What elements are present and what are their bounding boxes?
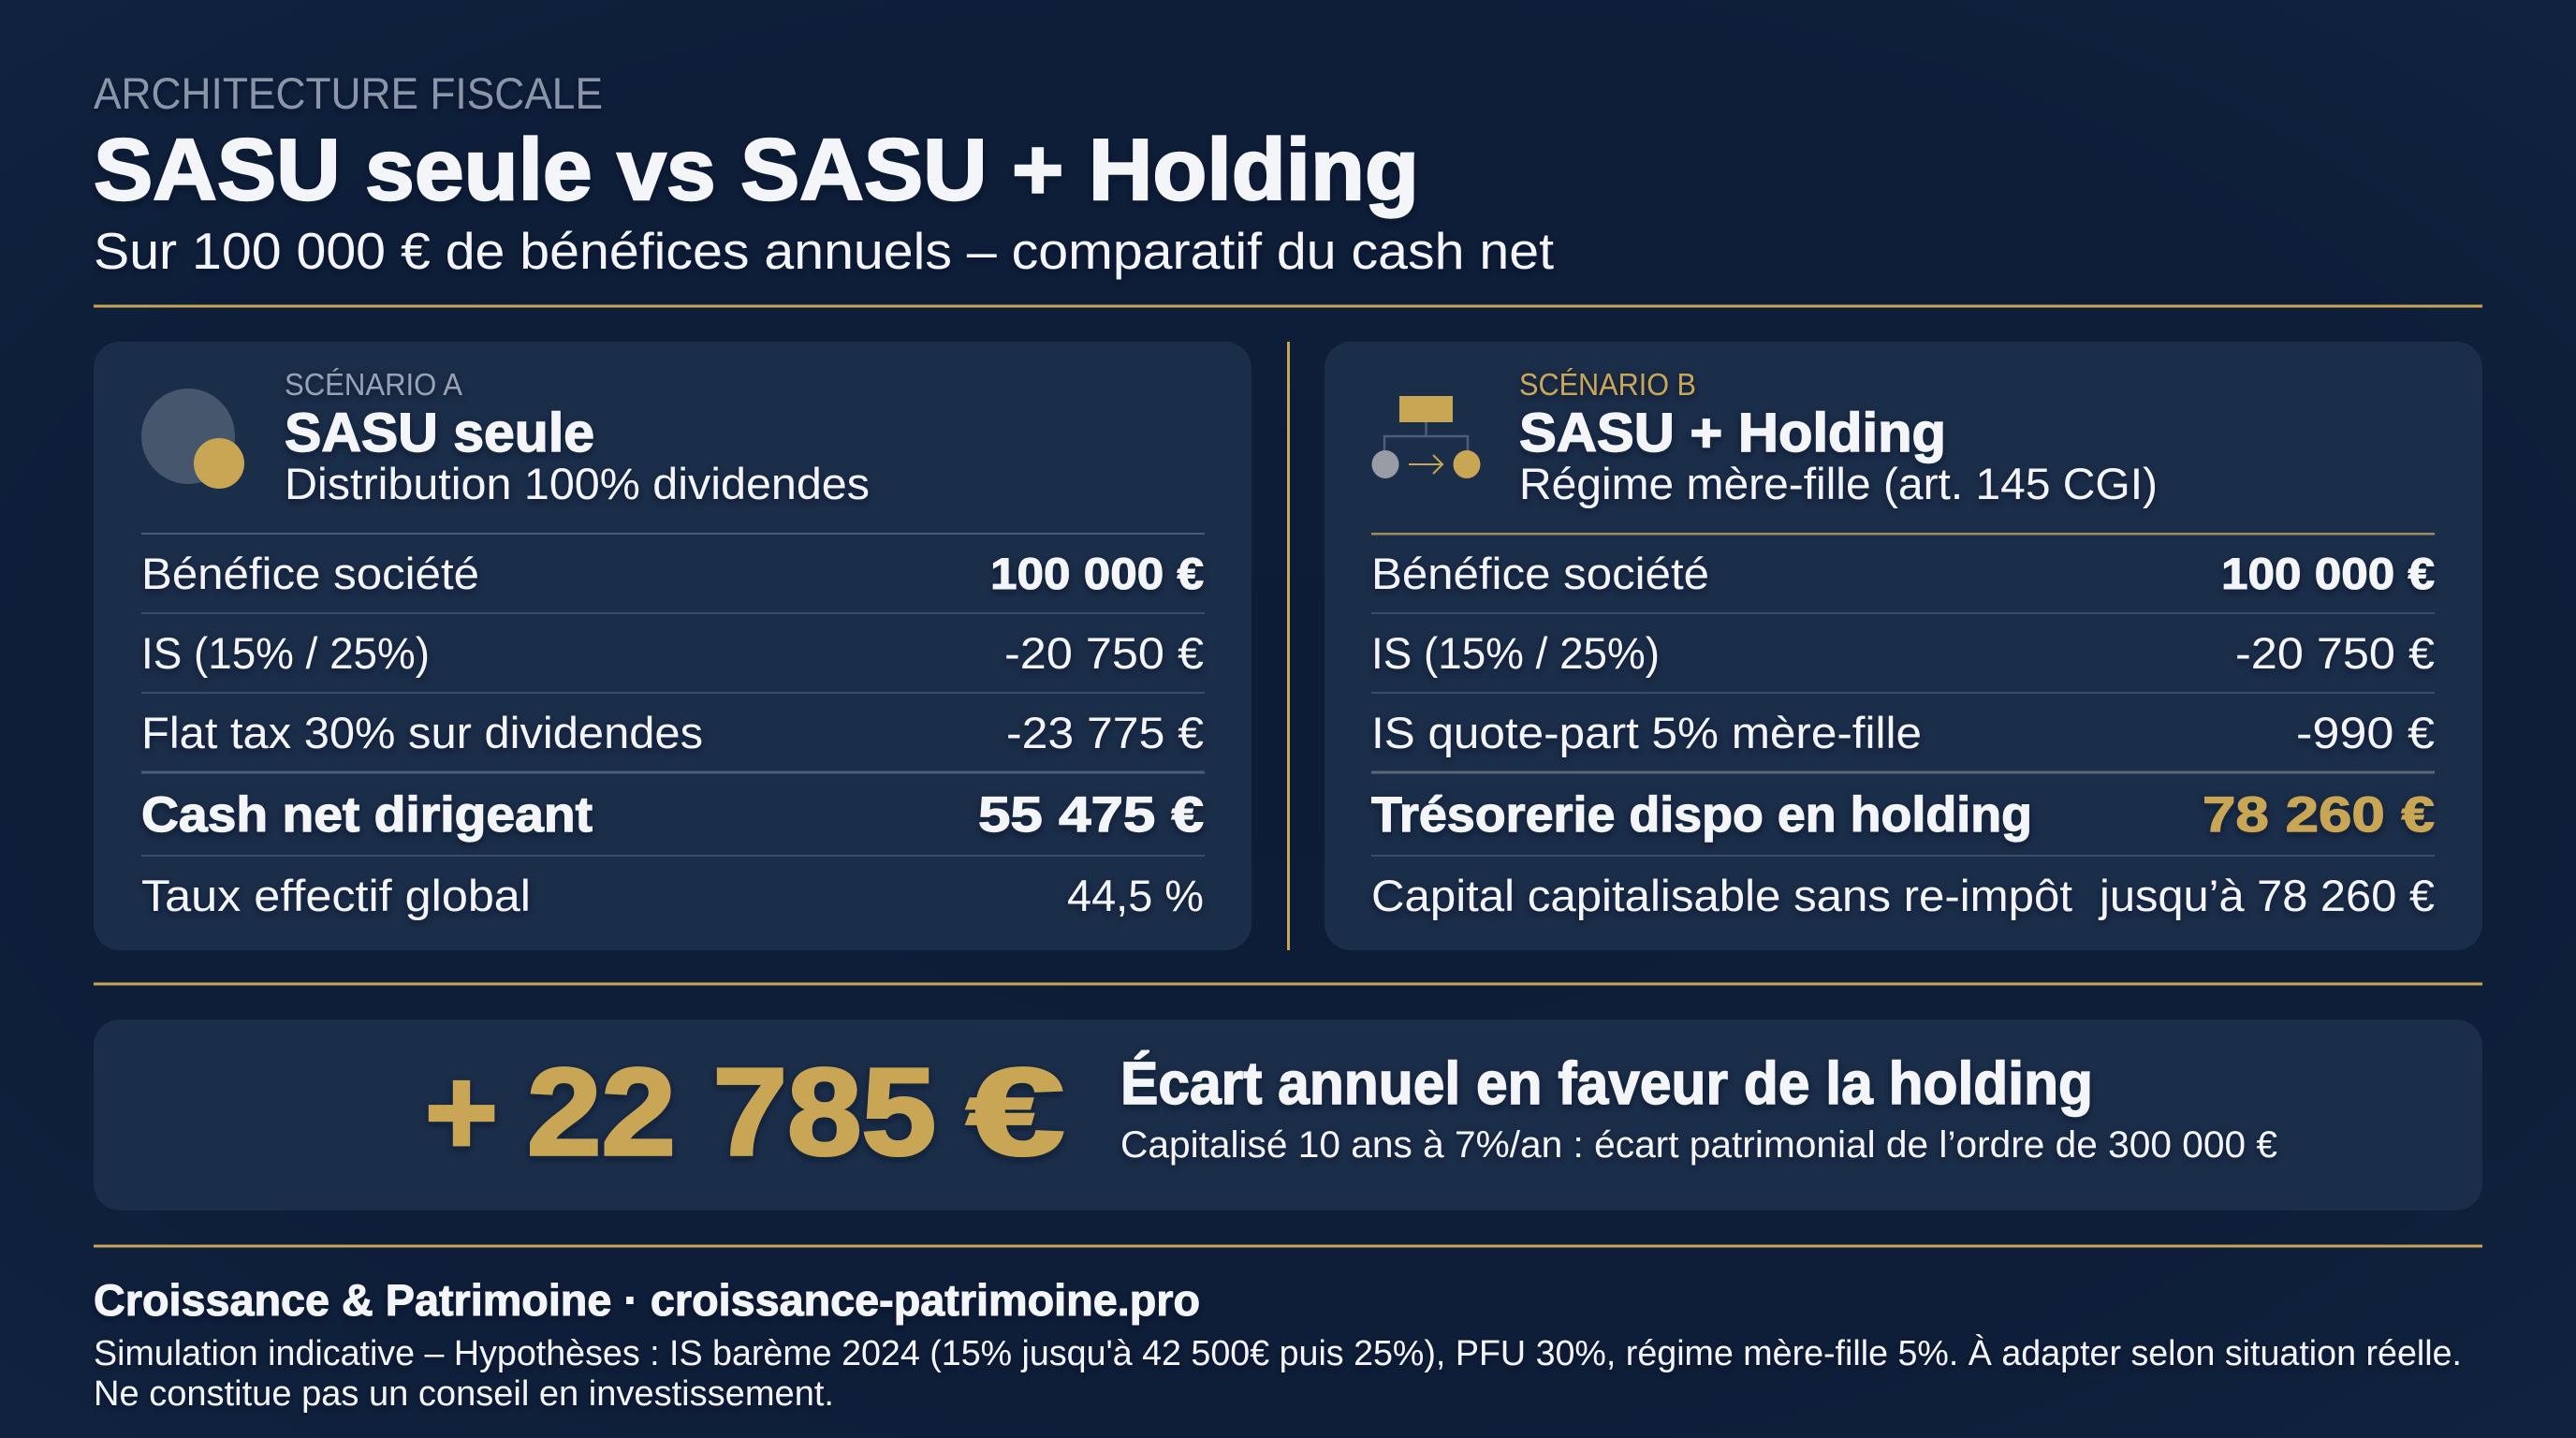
rows table B: jusqu’à 78 260 € <box>2098 871 2435 920</box>
disclaimer <box>94 1333 2462 1414</box>
eyebrow: ARCHITECTURE FISCALE <box>94 68 603 118</box>
scenario A heading: SCÉNARIO A <box>285 367 462 402</box>
rows table B: -990 € <box>2296 708 2435 757</box>
rows table B: IS quote-part 5% mère-fille <box>1371 708 1922 757</box>
rows table A: IS (15% / 25%) <box>141 628 430 678</box>
scenario A heading <box>285 367 870 508</box>
footer <box>94 1275 2462 1414</box>
rows table A: Bénéfice société <box>141 549 479 598</box>
panel: annual gap band <box>94 1020 2482 1211</box>
rows table B: Trésorerie dispo en holding <box>1371 787 2032 843</box>
brand line: Croissance & Patrimoine · croissance-patrimoine.pro <box>94 1275 1200 1325</box>
rows table B: Capital capitalisable sans re-impôt <box>1371 871 2072 920</box>
disclaimer: Simulation indicative – Hypothèses : IS barème 2024 (15% jusqu'à 42 500€ puis 25%), PFU 30%, régime mère-fille 5%. À adapter selon situation réelle. <box>94 1333 2462 1373</box>
big number: 22 785 <box>527 1043 936 1181</box>
rows table A: Cash net dirigeant <box>141 787 593 843</box>
rows table A: -23 775 € <box>1006 708 1204 757</box>
title: SASU seule vs SASU + Holding <box>94 121 1419 218</box>
gap explanation <box>1120 1049 2277 1166</box>
rows table A: Taux effectif global <box>141 871 531 920</box>
gap explanation: Capitalisé 10 ans à 7%/an : écart patrimonial de l’ordre de 300 000 € <box>1120 1124 2277 1166</box>
panel: scenario B <box>1325 342 2482 950</box>
rows table B <box>1371 549 2435 920</box>
gap explanation: Écart annuel en faveur de la holding <box>1120 1049 2093 1117</box>
subtitle: Sur 100 000 € de bénéfices annuels – comparatif du cash net <box>94 222 1554 280</box>
icon: overlapping circles <box>141 389 244 489</box>
panel: scenario A <box>94 342 1251 950</box>
icon: holding structure <box>1372 396 1481 478</box>
scenario B heading <box>1519 367 2158 508</box>
rows table B: Bénéfice société <box>1371 549 1709 598</box>
rows table A: 44,5 % <box>1067 871 1204 920</box>
rows table A: -20 750 € <box>1004 628 1204 678</box>
rows table B: 100 000 € <box>2221 549 2435 598</box>
rows table B: 78 260 € <box>2203 787 2435 843</box>
big number <box>425 1043 1064 1181</box>
scenario A heading: Distribution 100% dividendes <box>285 459 870 508</box>
big number: € <box>967 1043 1064 1181</box>
scenario B heading: SASU + Holding <box>1519 403 1946 463</box>
rows table B: -20 750 € <box>2235 628 2435 678</box>
scenario B heading: SCÉNARIO B <box>1519 367 1696 402</box>
rows table A <box>141 549 1204 920</box>
rows table B: IS (15% / 25%) <box>1371 628 1660 678</box>
disclaimer: Ne constitue pas un conseil en investissement. <box>94 1374 834 1414</box>
scenario A heading: SASU seule <box>285 403 594 463</box>
header <box>94 68 1554 280</box>
scenario B heading: Régime mère-fille (art. 145 CGI) <box>1519 459 2158 508</box>
big number: + <box>425 1043 498 1181</box>
rows table A: Flat tax 30% sur dividendes <box>141 708 703 757</box>
vertical divider <box>1287 342 1290 950</box>
rows table A: 55 475 € <box>978 787 1204 843</box>
rows table A: 100 000 € <box>990 549 1204 598</box>
